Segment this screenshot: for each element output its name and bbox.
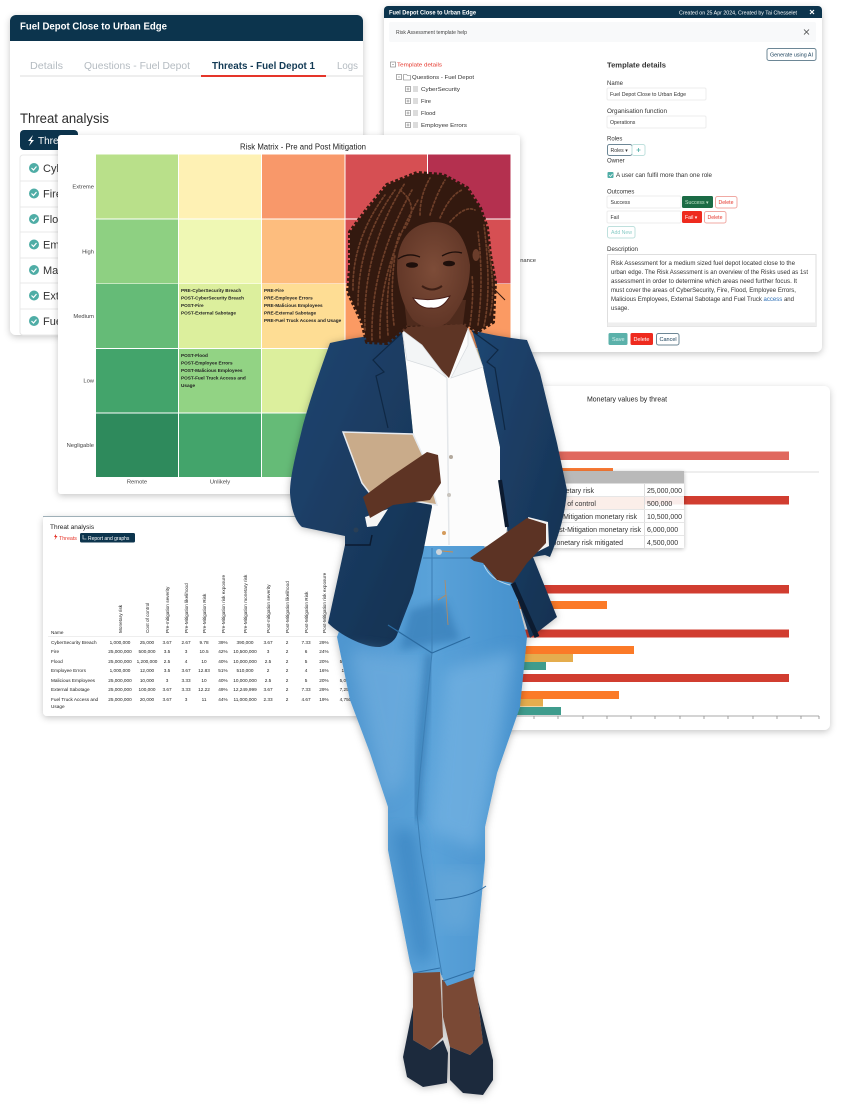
threat table: Fire bbox=[51, 649, 59, 654]
template details form: Fuel Depot Close to Urban Edge bbox=[610, 92, 686, 98]
panel: monetary values chart bbox=[400, 386, 830, 730]
tabs: Logs bbox=[337, 60, 358, 72]
panel: risk matrix bbox=[58, 135, 520, 494]
threat table: 10.5 bbox=[199, 649, 209, 654]
threat table: 2 bbox=[286, 687, 289, 692]
hair braids bbox=[353, 178, 493, 340]
table heading: Threat analysis bbox=[50, 524, 95, 531]
threat table: 4 bbox=[305, 668, 308, 673]
axis labels: Remote bbox=[127, 480, 147, 486]
rotated column headers: Monetary risk bbox=[118, 604, 123, 633]
threat table: 1,000,000 bbox=[110, 668, 131, 673]
threat table: 16% bbox=[319, 668, 329, 673]
template details form: Name bbox=[607, 81, 624, 87]
matrix threat labels: POST-Employee Errors bbox=[181, 360, 233, 366]
threat table: 10 bbox=[201, 678, 207, 683]
matrix threat labels: PRE-Employee Errors bbox=[264, 296, 313, 300]
shirt bbox=[402, 328, 507, 546]
panel: threat analysis table bbox=[43, 516, 383, 716]
threat table: 10,000 bbox=[140, 678, 155, 683]
header bar: template window: Created on 25 Apr 2024, Created by Tai Chesselet bbox=[679, 10, 797, 16]
threat table: 11,000,000 bbox=[233, 697, 257, 702]
threat table: 20,000 bbox=[140, 697, 155, 702]
matrix threat labels: PRE-CyberSecurity Breach bbox=[181, 288, 241, 293]
threat table: 2 bbox=[286, 678, 289, 683]
threat list: Flood bbox=[43, 214, 71, 226]
threat table: 3 bbox=[185, 697, 188, 702]
template details form: Operations bbox=[610, 120, 636, 126]
outcomes controls bbox=[607, 196, 737, 238]
threat table: 7,250,000 bbox=[340, 687, 361, 692]
template details form: A user can fulfil more than one role bbox=[616, 173, 713, 179]
threat table: 7.33 bbox=[301, 687, 311, 692]
threat table: 2 bbox=[286, 649, 289, 654]
description textarea: must cover the areas of CyberSecurity, Fire, Flood, Employee Errors, bbox=[611, 288, 796, 294]
threat table: 12,000 bbox=[140, 668, 155, 673]
threat table: 2.5 bbox=[164, 659, 171, 664]
shoes bbox=[403, 1000, 493, 1095]
tooltip table: Pre-Mitigation monetary risk bbox=[550, 514, 637, 521]
threat table: 12.83 bbox=[198, 668, 210, 673]
threat table: 44% bbox=[218, 697, 228, 702]
threat table bbox=[48, 572, 380, 709]
threat table: External Sabotage bbox=[51, 687, 90, 692]
left hand bbox=[363, 452, 441, 518]
template details form: Template details bbox=[607, 60, 666, 70]
form action buttons: Cancel bbox=[660, 337, 677, 343]
nose bbox=[422, 286, 442, 290]
tooltip table: 500,000 bbox=[647, 501, 672, 508]
threat table: 500,000 bbox=[139, 649, 156, 654]
tab buttons: Report and graphs bbox=[88, 536, 130, 542]
threat table: 10,000,000 bbox=[233, 659, 257, 664]
axis labels: Extreme bbox=[72, 184, 94, 190]
threat table: 5,000,000 bbox=[340, 678, 361, 683]
neck shadow bbox=[404, 300, 466, 326]
threat table: 4,750,000 bbox=[340, 697, 361, 702]
threat table: 160,000 bbox=[342, 668, 359, 673]
threat table: 10 bbox=[201, 659, 207, 664]
threat table: Employee Errors bbox=[51, 668, 87, 673]
description textarea: usage. bbox=[611, 306, 629, 312]
threat table: 20% bbox=[319, 678, 329, 683]
smile bbox=[413, 296, 450, 308]
face bbox=[397, 222, 470, 328]
axis labels: Low bbox=[83, 378, 95, 384]
axis labels: High bbox=[82, 250, 94, 256]
right hand in pocket bbox=[470, 518, 546, 583]
description textarea: assessment in order to determine which areas need further focus. It bbox=[611, 279, 797, 285]
matrix threat labels: POST-Fire bbox=[181, 303, 204, 308]
sprig bbox=[490, 285, 505, 300]
left cuff bbox=[365, 509, 388, 527]
rotated column headers: Pre-Mitigation Risk bbox=[202, 593, 207, 633]
ankles bbox=[413, 970, 483, 1055]
template tree: Template details bbox=[397, 62, 442, 68]
threat table: 25,000 bbox=[140, 640, 155, 645]
threat list: External Sabotage bbox=[43, 290, 134, 302]
description textarea: urban edge. The Risk Assessment is an overview of the Risks used as 1st bbox=[611, 270, 808, 276]
threat table: 25,000,000 bbox=[108, 649, 132, 654]
jeans bbox=[337, 545, 527, 986]
header bar: template window bbox=[384, 6, 822, 18]
threat table: 6 bbox=[305, 649, 308, 654]
threat table: 5 bbox=[305, 678, 308, 683]
template tree: Employee Errors bbox=[421, 123, 467, 129]
header bar: threats window bbox=[10, 15, 363, 41]
button: threats: Threats bbox=[38, 136, 72, 147]
axis labels: Unlikely bbox=[210, 480, 230, 486]
help bar bbox=[389, 22, 816, 42]
threat table: 2.5 bbox=[265, 678, 272, 683]
matrix threat labels bbox=[181, 288, 342, 388]
tabs: Details bbox=[30, 60, 63, 72]
threat list: Malicious Employees bbox=[43, 265, 147, 277]
rotated column headers: Cost of control bbox=[145, 603, 150, 633]
tooltip table bbox=[520, 471, 684, 548]
matrix threat labels: PRE-External Sabotage bbox=[264, 310, 316, 316]
threat table: 510,000 bbox=[237, 668, 254, 673]
threat table: 2 bbox=[286, 640, 289, 645]
threat list: Fire bbox=[43, 188, 62, 200]
neck bbox=[402, 312, 468, 378]
threat table: 40% bbox=[218, 659, 228, 664]
threat table: 25,000,000 bbox=[108, 697, 132, 702]
threat table: 3 bbox=[267, 649, 270, 654]
tooltip table: 6,000,000 bbox=[647, 527, 678, 534]
threat table: 39% bbox=[218, 640, 228, 645]
rotated column headers bbox=[51, 572, 327, 635]
hair mass bbox=[348, 173, 495, 343]
jacket lapels bbox=[373, 331, 505, 430]
description textarea: Risk Assessment for a medium sized fuel depot located close to the bbox=[611, 261, 796, 267]
matrix cells bbox=[96, 154, 510, 477]
threat table: 100,000 bbox=[139, 687, 156, 692]
panel: threats tab window bbox=[10, 15, 363, 335]
threat table: 3.33 bbox=[181, 678, 191, 683]
axis labels: Negligable bbox=[67, 443, 94, 449]
description textarea bbox=[607, 247, 816, 326]
jacket right and sleeve bbox=[472, 330, 567, 638]
threat table: 51% bbox=[218, 668, 228, 673]
threat table: 2 bbox=[286, 668, 289, 673]
description textarea: Malicious Employees, External Sabotage and Fuel Truck access and bbox=[611, 297, 794, 303]
threat table: 3.67 bbox=[263, 640, 273, 645]
threat table: 7.33 bbox=[301, 640, 311, 645]
shirt collar bbox=[402, 328, 483, 378]
threat table: 9.78 bbox=[199, 640, 209, 645]
rotated column headers: Name bbox=[51, 630, 64, 635]
rotated column headers: Post-Mitigation Risk bbox=[304, 591, 309, 633]
outcomes controls: Add New bbox=[611, 230, 632, 236]
threat table: 25,000,000 bbox=[108, 687, 132, 692]
jeans shading bbox=[350, 600, 515, 960]
matrix threat labels: POST-Fuel Truck Access and bbox=[181, 376, 246, 380]
template tree: Flood bbox=[421, 111, 436, 117]
header bar: template window: Fuel Depot Close to Urban Edge bbox=[389, 10, 476, 16]
template details form: Organisation function bbox=[607, 109, 667, 115]
outcomes controls: Success bbox=[610, 200, 631, 206]
rotated column headers: Post-mitigation severity bbox=[266, 584, 271, 633]
rotated column headers: Pre-Mitigation risk exposure bbox=[221, 575, 226, 633]
threat table: 5,000,000 bbox=[340, 659, 361, 664]
threat list: CyberSecurity Breach bbox=[43, 163, 150, 175]
template tree: Fire bbox=[421, 99, 431, 105]
tablet bbox=[343, 432, 437, 505]
head bbox=[348, 173, 505, 343]
threat table: Flood bbox=[51, 659, 63, 664]
threat table: 25,000,000 bbox=[108, 659, 132, 664]
matrix threat labels: Usage bbox=[181, 383, 195, 388]
header bar: threats window: Fuel Depot Close to Urban Edge bbox=[20, 22, 167, 32]
button: generate using AI bbox=[767, 48, 816, 60]
template details form bbox=[607, 60, 713, 196]
matrix threat labels: PRE-Malicious Employees bbox=[264, 303, 323, 308]
template details form: Owner bbox=[607, 158, 625, 164]
threat table: 3.67 bbox=[162, 640, 172, 645]
threat table: 25,000,000 bbox=[108, 678, 132, 683]
threat table: 20% bbox=[319, 659, 329, 664]
threat table: Fuel Truck Access and bbox=[51, 697, 99, 702]
threat table: 1,000,000 bbox=[110, 640, 131, 645]
threat table: 3 bbox=[166, 678, 169, 683]
form action buttons bbox=[608, 333, 679, 345]
threat table: 3.5 bbox=[164, 668, 171, 673]
panel: template details window bbox=[384, 6, 822, 352]
tab buttons: Threats bbox=[59, 536, 77, 542]
threat table: 12.22 bbox=[198, 687, 210, 692]
right cuff bbox=[528, 517, 549, 553]
tabs bbox=[20, 60, 363, 77]
threat table: 3.33 bbox=[181, 687, 191, 692]
threat table: 24% bbox=[319, 649, 329, 654]
threat table: 1,200,000 bbox=[137, 659, 158, 664]
threat list bbox=[20, 155, 363, 335]
threat table: 10,000,000 bbox=[233, 678, 257, 683]
tooltip table: Monetary risk mitigated bbox=[551, 540, 623, 547]
help bar: Risk Assessment template help bbox=[396, 30, 467, 36]
template tree: Maintenance bbox=[503, 258, 536, 264]
matrix threat labels: POST-CyberSecurity Breach bbox=[181, 296, 244, 300]
outcomes controls: Fail bbox=[610, 215, 619, 221]
threat table: 10,500,000 bbox=[233, 649, 257, 654]
tabs: Questions - Fuel Depot bbox=[84, 60, 190, 72]
bar chart bbox=[450, 452, 819, 719]
threat table: CyberSecurity Breach bbox=[51, 640, 97, 645]
matrix threat labels: PRE-Fuel Truck Access and Usage bbox=[264, 318, 342, 323]
jeans seams bbox=[388, 548, 510, 981]
template details form: Roles ▾ bbox=[610, 148, 628, 154]
tooltip table: 4,500,000 bbox=[647, 540, 678, 547]
jacket trim bbox=[345, 480, 537, 637]
ear bbox=[472, 249, 480, 261]
threat table: 12,249,999 bbox=[233, 687, 257, 692]
form action buttons: Delete bbox=[634, 337, 649, 343]
description textarea: Description bbox=[607, 247, 638, 253]
tooltip table: 10,500,000 bbox=[647, 514, 682, 521]
matrix threat labels: PRE-Fire bbox=[264, 288, 284, 293]
button: threats bbox=[20, 130, 78, 150]
rotated column headers: Post-Mitigation likelihood bbox=[285, 581, 290, 633]
tabs: Threats - Fuel Depot 1 bbox=[212, 60, 315, 72]
matrix threat labels: POST-Malicious Employees bbox=[181, 368, 243, 373]
tooltip table: Cost of control bbox=[551, 501, 596, 508]
threat list: Fuel Truck Access and Usage bbox=[43, 316, 189, 328]
threat table: 3.67 bbox=[162, 687, 172, 692]
button: generate using AI: Generate using AI bbox=[770, 52, 813, 58]
threat table: 29% bbox=[319, 687, 329, 692]
woman with tablet bbox=[290, 173, 567, 1095]
threat table: 3.67 bbox=[181, 668, 191, 673]
template details form: Outcomes bbox=[607, 190, 634, 196]
threat table: 390,000 bbox=[237, 640, 254, 645]
threat table: 2.67 bbox=[181, 640, 191, 645]
threat table: Usage bbox=[51, 704, 65, 709]
shirt placket and buttons bbox=[442, 378, 453, 545]
template tree: Questions - Fuel Depot bbox=[412, 75, 474, 81]
tooltip table: 25,000,000 bbox=[647, 488, 682, 495]
outcomes controls: Delete bbox=[718, 200, 734, 206]
matrix threat labels: POST-External Sabotage bbox=[181, 310, 236, 316]
matrix threat labels: POST-Flood bbox=[181, 353, 208, 358]
axis labels bbox=[67, 184, 230, 486]
threat table: 5 bbox=[305, 659, 308, 664]
threat table: 11 bbox=[202, 697, 207, 702]
axis labels: Medium bbox=[73, 314, 94, 320]
template tree bbox=[390, 62, 536, 264]
threat table: 42% bbox=[218, 649, 228, 654]
jacket left and sleeve bbox=[290, 330, 432, 647]
threat table: 2 bbox=[286, 697, 289, 702]
threat table: 4 bbox=[185, 659, 188, 664]
rotated column headers: Pre-Mitigation likelihood bbox=[184, 583, 189, 633]
threat table: 29% bbox=[319, 640, 329, 645]
outcomes controls: Delete bbox=[708, 215, 723, 221]
threat table: 49% bbox=[218, 687, 228, 692]
rotated column headers: Post-Mitigation risk exposure bbox=[322, 572, 327, 633]
tab buttons bbox=[54, 533, 135, 542]
form action buttons: Save bbox=[612, 337, 625, 343]
threat table: 2 bbox=[267, 668, 270, 673]
threat table: 3 bbox=[185, 649, 188, 654]
outcomes controls: Fail ▾ bbox=[685, 215, 698, 221]
threat table: 19% bbox=[319, 697, 329, 702]
threat table: Malicious Employees bbox=[51, 678, 96, 683]
rotated column headers: Pre-Mitigation monetary risk bbox=[243, 574, 248, 633]
threat table: 2.5 bbox=[265, 659, 272, 664]
matrix title: Risk Matrix - Pre and Post Mitigation bbox=[240, 142, 366, 152]
threat table: 3.67 bbox=[162, 697, 172, 702]
threat table: 2.33 bbox=[263, 697, 273, 702]
threat table: 40% bbox=[218, 678, 228, 683]
outcomes controls: Success ▾ bbox=[685, 200, 709, 206]
threat list: Employee Errors bbox=[43, 240, 125, 252]
threat table: 4.67 bbox=[301, 697, 311, 702]
chart title: Monetary values by threat bbox=[587, 394, 668, 404]
threat table: 3.5 bbox=[164, 649, 171, 654]
threat table: 3.67 bbox=[263, 687, 273, 692]
tooltip table: Monetary risk bbox=[552, 488, 594, 495]
tooltip table: Post-Mitigation monetary risk bbox=[551, 527, 641, 534]
rotated column headers: Pre-mitigation severity bbox=[165, 586, 170, 633]
template details form: Roles bbox=[607, 136, 622, 142]
threat table: 2 bbox=[286, 659, 289, 664]
eyes and brows bbox=[398, 252, 462, 268]
template tree: CyberSecurity bbox=[421, 87, 460, 93]
heading: threat analysis: Threat analysis bbox=[20, 110, 109, 126]
